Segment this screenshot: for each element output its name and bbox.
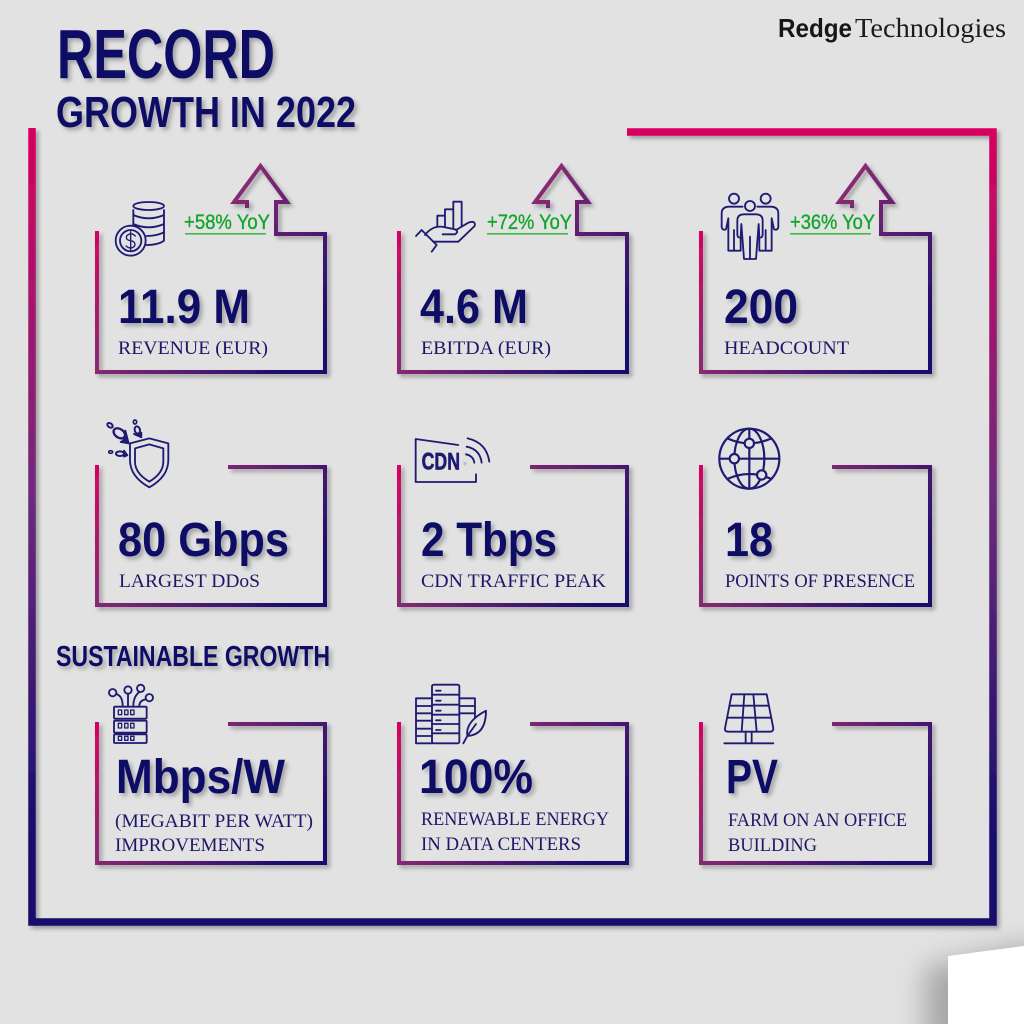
icon: server with nodes (109, 685, 153, 743)
label: REVENUE (EUR) (118, 338, 268, 359)
value: 80 Gbps (118, 514, 289, 567)
label: BUILDING (728, 835, 817, 856)
card outline (701, 465, 930, 605)
icon: hand with chart (416, 202, 475, 252)
title: GROWTH IN 2022 (56, 88, 356, 137)
value: 200 (724, 281, 798, 334)
card outline (97, 465, 325, 605)
label: CDN TRAFFIC PEAK (421, 571, 606, 592)
yoy growth: +72% YoY (487, 211, 572, 234)
label: LARGEST DDoS (119, 571, 260, 592)
card outline (399, 465, 627, 605)
value: 18 (725, 514, 773, 567)
value: 2 Tbps (421, 514, 557, 567)
card outline (399, 722, 627, 863)
icon: data center with leaf (416, 685, 486, 743)
outer gradient frame (32, 128, 993, 922)
card: ebitda (399, 166, 627, 372)
label: (MEGABIT PER WATT) (115, 811, 313, 832)
value: 11.9 M (118, 281, 250, 334)
folded white page corner (925, 942, 1024, 1024)
title: RECORD (57, 15, 275, 93)
card outline (97, 722, 325, 863)
label: HEADCOUNT (724, 338, 849, 359)
label: RENEWABLE ENERGY (421, 809, 609, 830)
icon: shield with bullets (106, 420, 168, 487)
card: headcount (701, 166, 930, 372)
value: PV (726, 751, 778, 804)
card: pv farm (701, 694, 930, 863)
heading: sustainable growth: SUSTAINABLE GROWTH (56, 641, 330, 673)
icon: globe (719, 429, 779, 489)
company logo (778, 13, 1006, 43)
card: revenue (97, 166, 325, 372)
icon: coins (116, 202, 164, 256)
card: mbps per watt (97, 685, 325, 863)
card outline with growth arrow (97, 166, 325, 372)
icon: cdn screen with signal: CDN (422, 448, 460, 475)
title (56, 15, 356, 137)
label: FARM ON AN OFFICE (728, 810, 907, 831)
yoy growth: +36% YoY (790, 211, 875, 234)
card outline (701, 722, 930, 863)
card: cdn (399, 438, 627, 605)
label (115, 811, 313, 856)
label: POINTS OF PRESENCE (725, 571, 915, 592)
label (421, 809, 609, 855)
card: ddos (97, 420, 325, 605)
value: Mbps/W (116, 751, 286, 804)
company logo: Redge (778, 13, 852, 43)
card: renewable energy (399, 685, 627, 863)
label: EBITDA (EUR) (421, 338, 551, 359)
card outline with growth arrow (399, 166, 627, 372)
label: IMPROVEMENTS (115, 835, 265, 856)
card outline with growth arrow (701, 166, 930, 372)
value: 4.6 M (420, 281, 528, 334)
yoy growth: +58% YoY (184, 211, 270, 234)
label (728, 810, 907, 856)
icon: people (722, 194, 778, 259)
company logo: Technologies (855, 13, 1006, 43)
icon: cdn screen with signal (416, 438, 489, 482)
icon: solar panel (724, 694, 773, 743)
value: 100% (419, 751, 533, 804)
label: IN DATA CENTERS (421, 834, 581, 855)
card: points of presence (701, 429, 930, 605)
